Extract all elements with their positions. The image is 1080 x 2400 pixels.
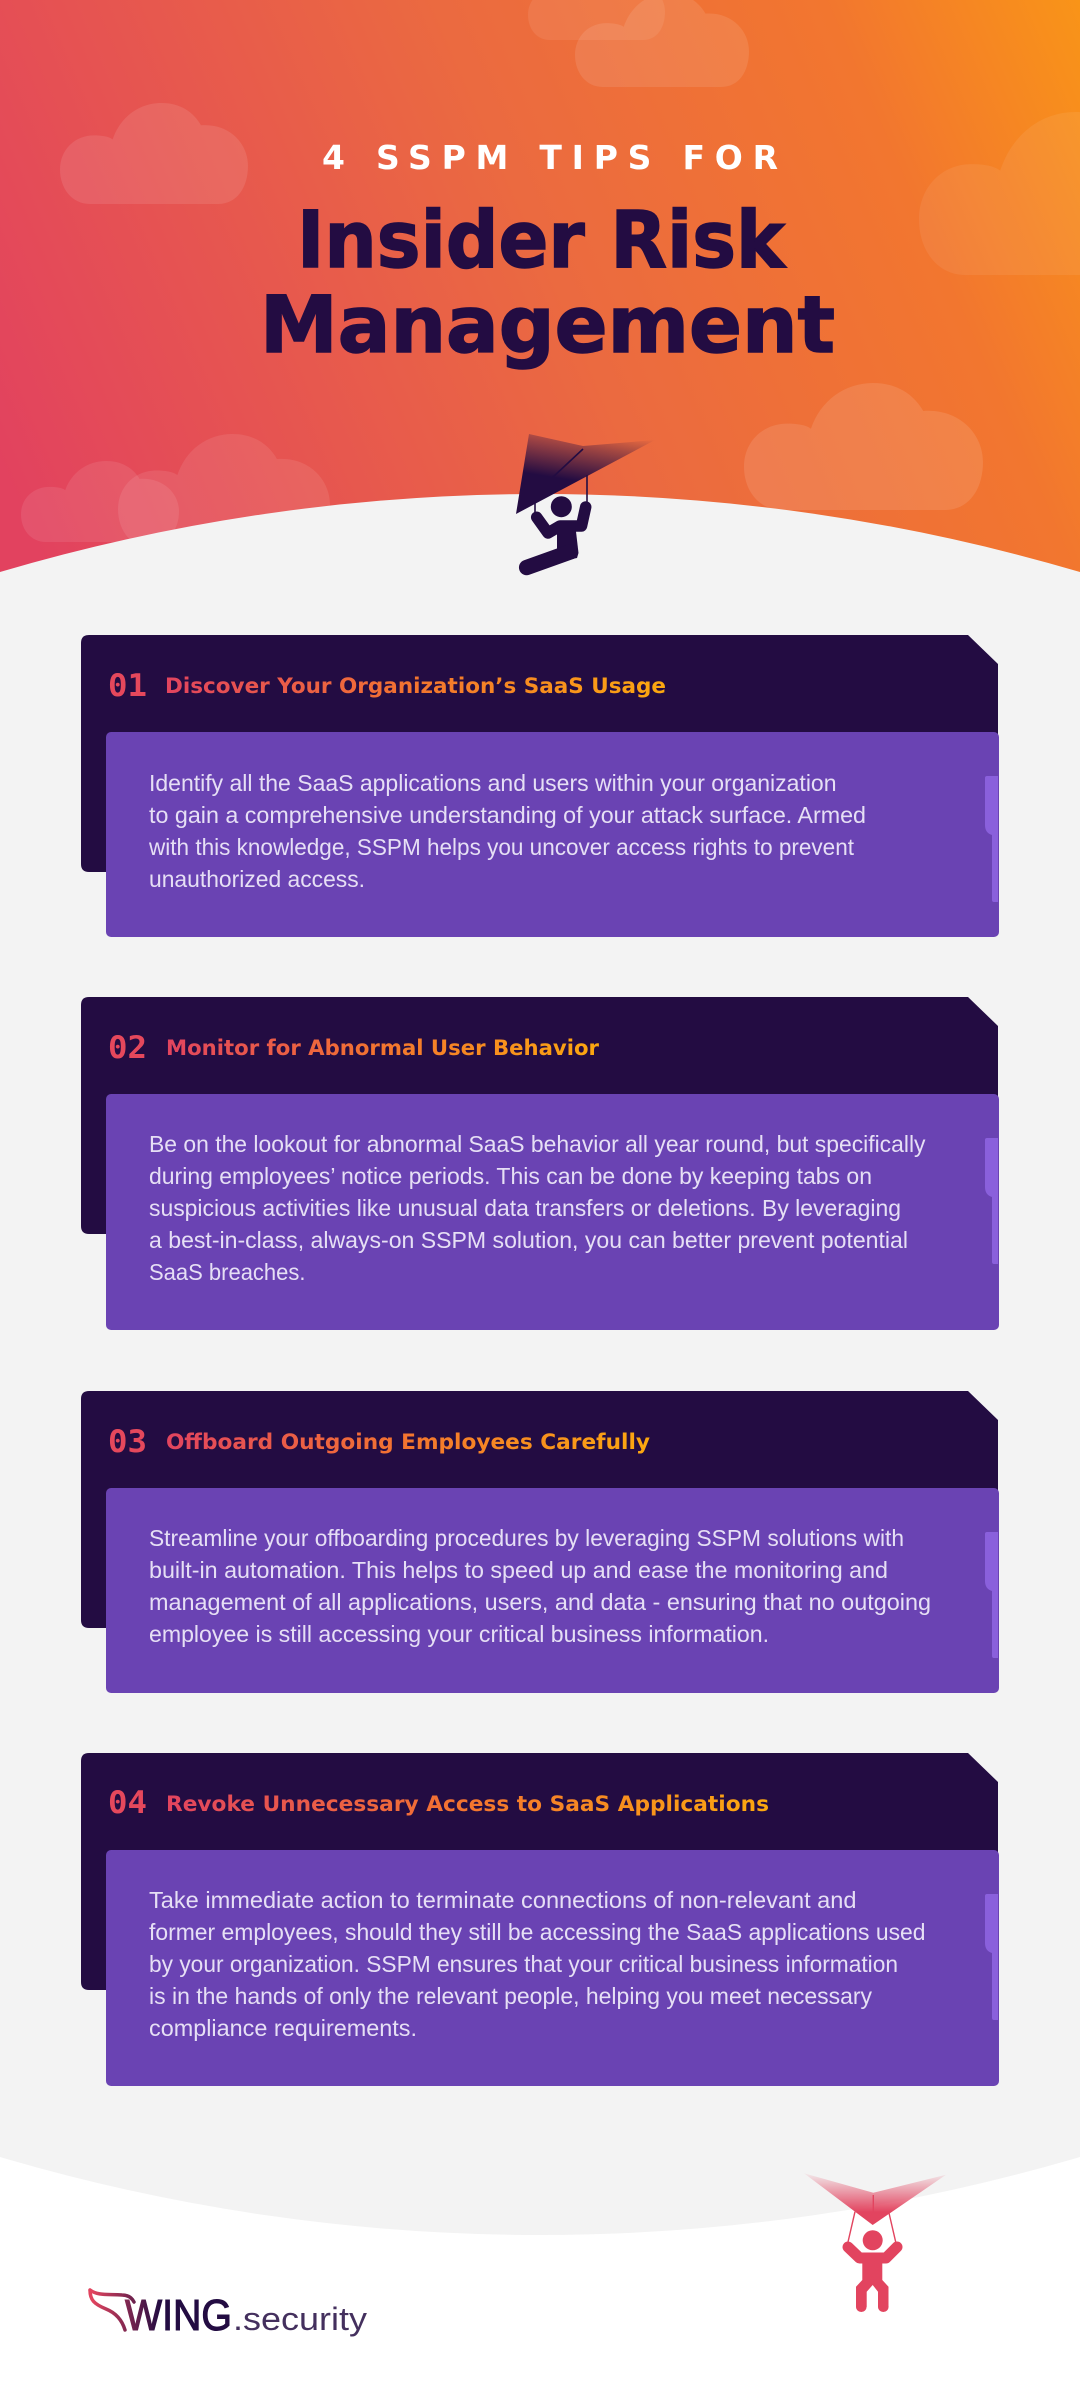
tip 02 body text: a best-in-class, always-on SSPM solution, you can better prevent potential: [149, 1227, 908, 1253]
tip 02 purple body card: [106, 1094, 999, 1330]
logo wing mark: [90, 2290, 134, 2330]
tip 01 body text: Identify all the SaaS applications and users within your organization: [149, 770, 836, 796]
tip 02 body text: [149, 1131, 926, 1285]
tip 04 number: 04: [108, 1785, 147, 1821]
tip 01 heading: Discover Your Organization’s SaaS Usage: [165, 674, 666, 699]
clouds: [21, 0, 1080, 548]
tip 01 side tab: [985, 776, 998, 902]
tip 02 body text: suspicious activities like unusual data transfers or deletions. By leveraging: [149, 1195, 901, 1221]
tip 01 body text: unauthorized access.: [149, 866, 365, 892]
tip 04 body text: former employees, should they still be accessing the SaaS applications used: [149, 1919, 926, 1945]
light grey main panel with curved top and bottom: [0, 494, 1080, 2235]
tip 04 purple body card: [106, 1850, 999, 2086]
tip 03 body text: [149, 1525, 931, 1647]
tip 01 purple body card: [106, 732, 999, 937]
logo wordmark: WING: [125, 2291, 232, 2340]
title block: [260, 138, 835, 371]
tip 04 dark header card: [81, 1753, 998, 1990]
tip 01 body text: with this knowledge, SSPM helps you uncover access rights to prevent: [148, 834, 855, 860]
tip 03 body text: built-in automation. This helps to speed up and ease the monitoring and: [149, 1557, 888, 1583]
tip 03 side tab: [985, 1532, 998, 1658]
tip 03 body text: Streamline your offboarding procedures by leveraging SSPM solutions with: [149, 1525, 904, 1551]
tip 02 dark header card: [81, 997, 998, 1234]
tip 01 number: 01: [108, 668, 147, 704]
tip 03 body text: management of all applications, users, and data - ensuring that no outgoing: [149, 1589, 931, 1615]
tip 01 body text: [148, 770, 866, 892]
tip 03 number: 03: [108, 1424, 147, 1460]
tip 02 body text: Be on the lookout for abnormal SaaS behavior all year round, but specifically: [149, 1131, 926, 1157]
tip 04 heading: Revoke Unnecessary Access to SaaS Applications: [166, 1792, 769, 1817]
tip 02 heading: Monitor for Abnormal User Behavior: [166, 1036, 599, 1061]
tip 02 body text: during employees’ notice periods. This can be done by keeping tabs on: [149, 1163, 872, 1189]
tip 02 body text: SaaS breaches.: [149, 1259, 306, 1285]
header gradient background: [0, 0, 1080, 600]
tip 03 dark header card: [81, 1391, 998, 1628]
tip 03 purple body card: [106, 1488, 999, 1693]
panel: tip 03: [81, 1391, 999, 1693]
icon: hang glider person: [516, 434, 655, 568]
panel: tip 04: [81, 1753, 999, 2086]
tip 02 side tab: [985, 1138, 998, 1264]
tip 02 number: 02: [108, 1030, 147, 1066]
title: eyebrow: 4 SSPM TIPS FOR: [322, 138, 778, 177]
tip 01 body text: to gain a comprehensive understanding of your attack surface. Armed: [149, 802, 866, 828]
tip 04 body text: by your organization. SSPM ensures that your critical business information: [149, 1951, 898, 1977]
logo suffix: .security: [233, 2301, 367, 2337]
tip 04 body text: compliance requirements.: [149, 2015, 417, 2041]
tip 04 body text: Take immediate action to terminate connections of non-relevant and: [149, 1887, 856, 1913]
tip 04 side tab: [985, 1894, 998, 2020]
title: line one: Insider Risk: [297, 196, 787, 286]
tip 04 body text: [149, 1887, 926, 2041]
tip 03 heading: Offboard Outgoing Employees Carefully: [166, 1430, 650, 1455]
panel: tip 01: [81, 635, 999, 937]
tip 01 dark header card: [81, 635, 998, 872]
tip 03 body text: employee is still accessing your critical business information.: [149, 1621, 769, 1647]
panel: tip 02: [81, 997, 999, 1330]
tip 04 body text: is in the hands of only the relevant people, helping you meet necessary: [149, 1983, 872, 2009]
title: line two: Management: [260, 281, 835, 371]
logo: Wing Security: [90, 2290, 367, 2340]
icon: parachuting person: [804, 2173, 946, 2312]
